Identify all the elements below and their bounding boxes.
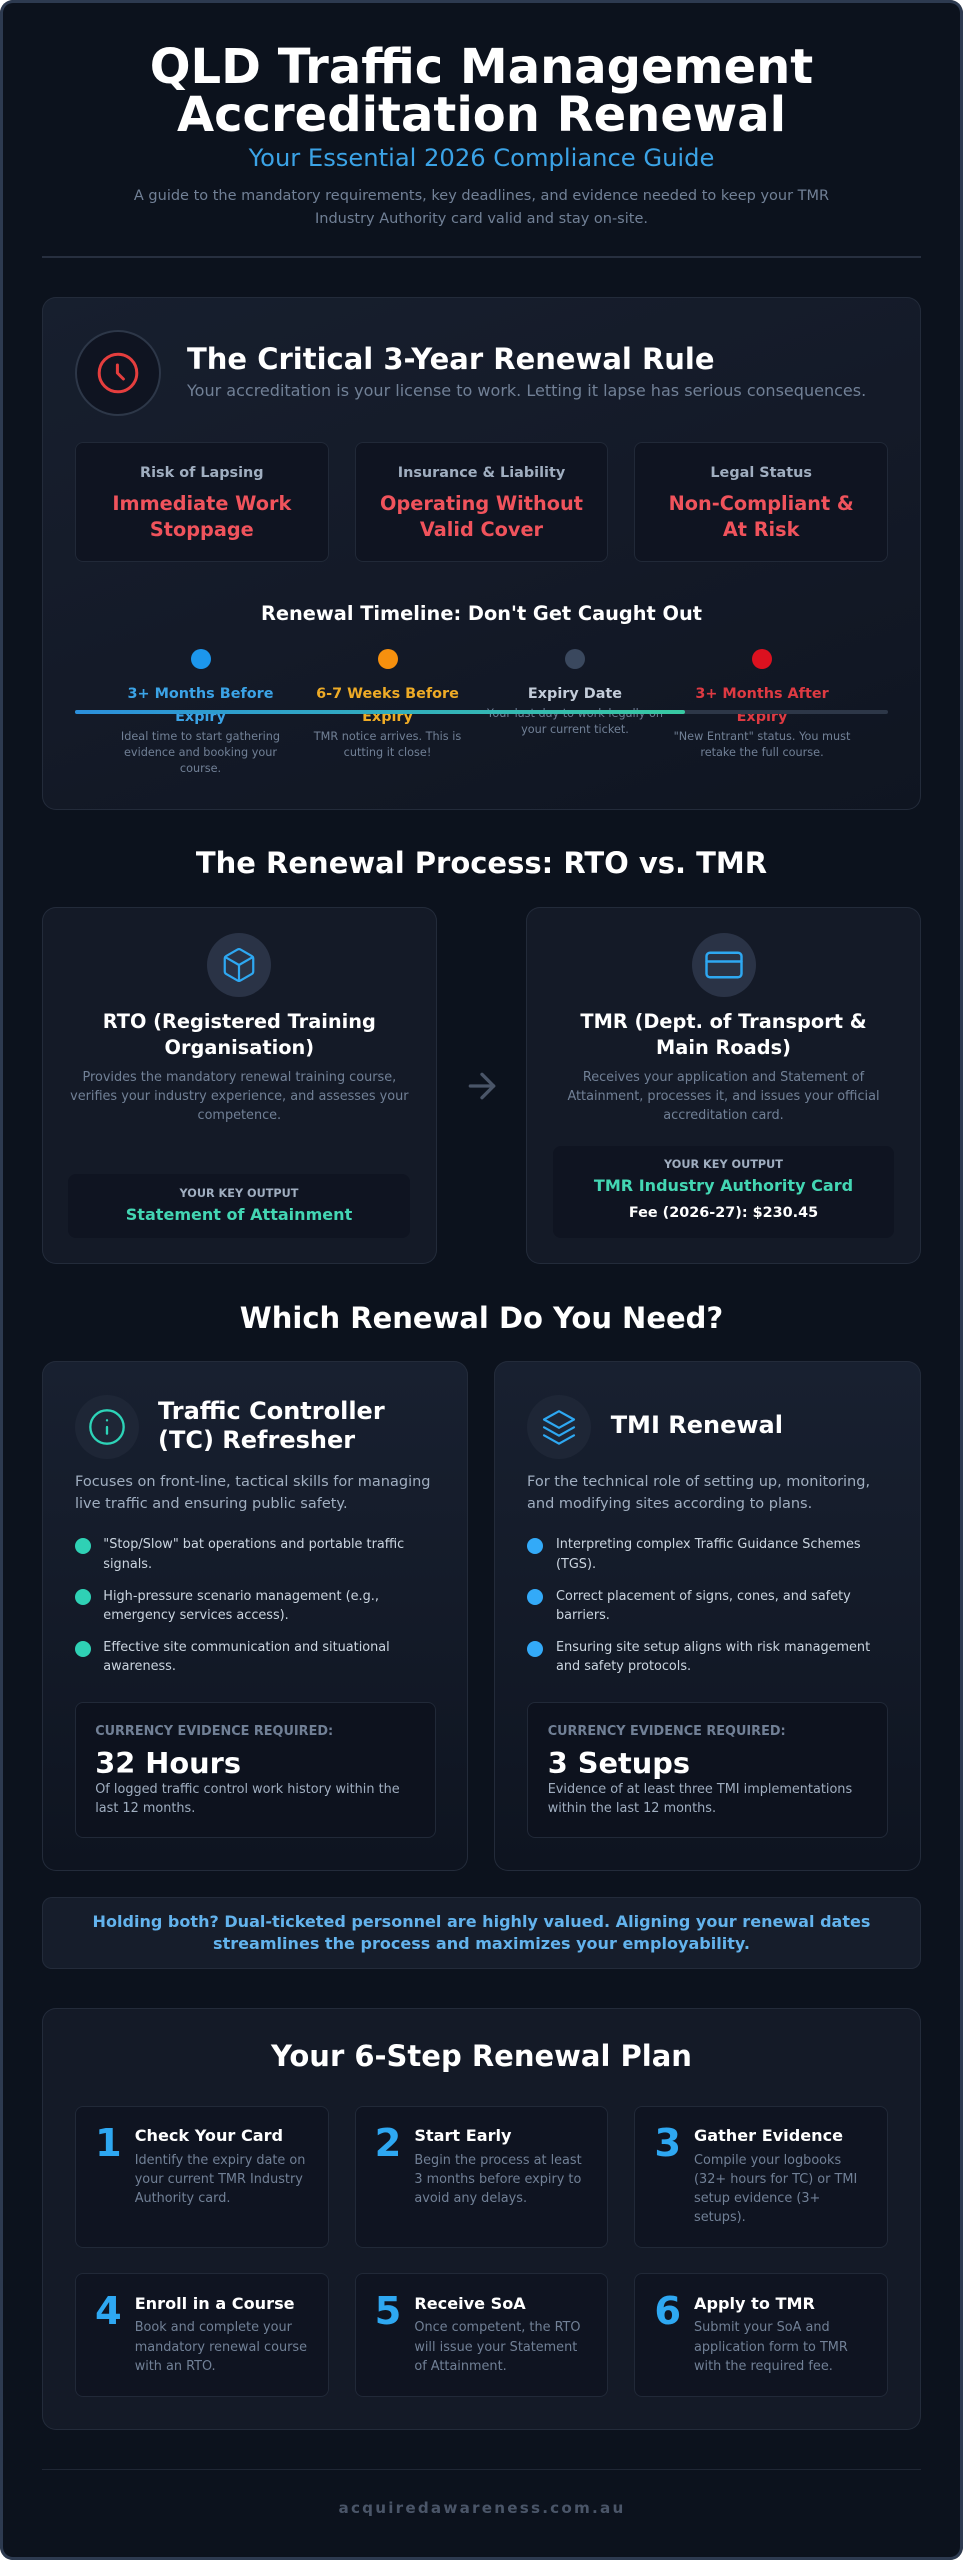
bullet text — [103, 1537, 404, 1572]
timeline dot: 3+ months before — [190, 649, 210, 669]
step title: Check Your Card — [135, 2126, 283, 2145]
step text: Once competent, the RTO — [414, 2320, 581, 2335]
TC description: Focuses on front-line, tactical skills for managing — [75, 1474, 430, 1490]
panel heading: The Critical 3-Year Renewal Rule — [187, 342, 715, 376]
timeline track — [75, 710, 888, 714]
icon: info — [75, 1395, 139, 1459]
step text — [414, 2153, 582, 2206]
card value: Valid Cover — [420, 518, 543, 540]
TMI description: For the technical role of setting up, monitoring, — [527, 1474, 870, 1490]
TMR heading: TMR (Dept. of Transport & — [580, 1010, 867, 1033]
step text: Book and complete your — [135, 2320, 292, 2335]
TMI description — [527, 1474, 870, 1512]
step text: of Attainment. — [414, 2359, 507, 2374]
fee: Fee (2026-27): $230.45 — [629, 1205, 818, 1221]
timeline label: 3+ months after: Expiry — [737, 709, 787, 725]
TMR heading: Main Roads) — [656, 1036, 791, 1059]
bullet text: (TGS). — [556, 1556, 596, 1572]
output label: YOUR KEY OUTPUT — [180, 1187, 298, 1200]
timeline label: 3+ months before — [128, 686, 273, 725]
callout text: Holding both? Dual-ticketed personnel are highly valued. Aligning your renewal dates — [93, 1912, 870, 1931]
RTO description — [70, 1070, 409, 1123]
step 1 — [75, 2106, 329, 2248]
RTO description: verifies your industry experience, and assesses your — [70, 1089, 409, 1104]
timeline text: 6-7 weeks before — [314, 730, 461, 758]
TC heading — [158, 1397, 385, 1454]
step title: Enroll in a Course — [135, 2294, 295, 2313]
timeline text: expiry date: Your last day to work legally on — [487, 707, 663, 720]
card value: Immediate Work — [112, 492, 291, 514]
step number: 1 — [95, 2121, 122, 2166]
evidence value: 32 Hours — [95, 1746, 241, 1780]
timeline label: 3+ months before: Expiry — [175, 709, 226, 725]
step text: application form to TMR — [694, 2340, 848, 2355]
bullet marker — [527, 1589, 543, 1605]
step text: Identify the expiry date on — [135, 2153, 305, 2168]
step text — [414, 2320, 581, 2374]
step title: Receive SoA — [414, 2294, 526, 2313]
timeline text: 6-7 weeks before: cutting it close! — [344, 746, 431, 758]
bullet marker — [527, 1538, 543, 1554]
card value — [380, 492, 583, 540]
panel: traffic controller refresher — [42, 1361, 468, 1871]
step text: setup evidence (3+ — [694, 2191, 820, 2206]
evidence text: last 12 months. — [95, 1801, 195, 1816]
panel heading: Your 6-Step Renewal Plan — [271, 2039, 692, 2073]
intro text — [134, 188, 829, 227]
timeline text: 3+ months after: retake the full course. — [700, 746, 824, 758]
RTO description: Provides the mandatory renewal training course, — [82, 1070, 396, 1085]
timeline text: 3+ months before: Ideal time to start gathering — [121, 730, 280, 742]
evidence text — [548, 1782, 852, 1816]
card value — [112, 492, 292, 540]
TC heading: (TC) Refresher — [158, 1426, 355, 1454]
card: legal status — [634, 442, 888, 562]
step title: Apply to TMR — [694, 2294, 815, 2313]
bullet marker — [75, 1589, 91, 1605]
step text: Submit your SoA and — [694, 2320, 830, 2335]
bullet text — [556, 1640, 870, 1674]
currency evidence box — [74, 1702, 436, 1838]
evidence text: within the last 12 months. — [548, 1801, 716, 1816]
timeline dot: expiry date — [565, 649, 585, 669]
card label: Legal Status — [710, 465, 812, 481]
step text: setups). — [694, 2210, 746, 2225]
RTO key output — [68, 1174, 410, 1238]
step text: with an RTO. — [135, 2359, 216, 2374]
bullet text: "Stop/Slow" bat operations and portable traffic — [103, 1537, 404, 1552]
callout: dual-ticketed — [42, 1897, 921, 1969]
icon: layers — [527, 1395, 591, 1459]
bullet text — [103, 1640, 390, 1674]
timeline label: 6-7 weeks before — [316, 686, 459, 725]
timeline label: 3+ months before: 3+ Months Before — [128, 686, 273, 702]
callout text: streamlines the process and maximizes your employability. — [213, 1934, 750, 1953]
bullet text: Interpreting complex Traffic Guidance Schemes — [556, 1537, 861, 1552]
timeline text: 6-7 weeks before: TMR notice arrives. This is — [314, 730, 461, 742]
card value: Non-Compliant & — [669, 492, 854, 514]
output label: YOUR KEY OUTPUT — [664, 1158, 783, 1171]
step 4 — [75, 2273, 329, 2397]
timeline label: expiry date: Expiry Date — [528, 686, 622, 702]
icon: box — [207, 933, 271, 997]
step text: Begin the process at least — [414, 2153, 582, 2168]
evidence value: 3 Setups — [548, 1746, 690, 1780]
bullet text — [556, 1589, 851, 1623]
intro text: Industry Authority card valid and stay on-site. — [315, 211, 648, 227]
step text — [694, 2320, 848, 2374]
panel subheading: Your accreditation is your license to work. Letting it lapse has serious consequences. — [187, 381, 866, 400]
card value: Operating Without — [380, 492, 583, 514]
timeline text: 3+ months before: course. — [180, 762, 221, 774]
title: Accreditation Renewal — [177, 86, 786, 142]
step text: avoid any delays. — [414, 2191, 527, 2206]
RTO heading: RTO (Registered Training — [103, 1010, 376, 1033]
evidence label: CURRENCY EVIDENCE REQUIRED: — [548, 1724, 786, 1739]
step text: will issue your Statement — [414, 2340, 577, 2355]
bullet text — [556, 1537, 861, 1572]
evidence text: Of logged traffic control work history within the — [95, 1782, 400, 1797]
timeline progress — [75, 710, 685, 714]
icon: card — [692, 933, 756, 997]
TMR description — [567, 1070, 880, 1123]
card label: Risk of Lapsing — [140, 465, 264, 481]
step text: Authority card. — [135, 2191, 230, 2206]
TMI description: and modifying sites according to plans. — [527, 1496, 812, 1512]
output value: Statement of Attainment — [126, 1204, 352, 1224]
step title: Gather Evidence — [694, 2126, 843, 2145]
panel: TMI renewal — [494, 1361, 921, 1871]
timeline label: 6-7 weeks before: 6-7 Weeks Before — [316, 686, 459, 702]
step text: 3 months before expiry to — [414, 2172, 581, 2187]
RTO heading: Organisation) — [164, 1036, 314, 1059]
bullet text: awareness. — [103, 1659, 176, 1674]
step text: (32+ hours for TC) or TMI — [694, 2172, 857, 2187]
step number: 6 — [654, 2289, 681, 2334]
timeline heading: Renewal Timeline: Don't Get Caught Out — [261, 602, 702, 625]
step 6 — [634, 2273, 888, 2397]
bullet text: Ensuring site setup aligns with risk management — [556, 1640, 870, 1655]
timeline label: 3+ months after: 3+ Months After — [695, 686, 829, 702]
arrow — [468, 1072, 496, 1100]
step number: 3 — [654, 2121, 681, 2166]
footer: acquiredawareness.com.au — [338, 2498, 625, 2516]
TC heading: Traffic Controller — [158, 1397, 385, 1425]
step text — [694, 2153, 857, 2225]
callout text — [93, 1912, 870, 1953]
TC description: live traffic and ensuring public safety. — [75, 1496, 348, 1512]
TMR heading — [580, 1010, 867, 1059]
step number: 4 — [95, 2289, 122, 2334]
timeline dot: 3+ months after — [752, 649, 772, 669]
card: insurance and liability — [355, 442, 608, 562]
bullet text: Effective site communication and situational — [103, 1640, 390, 1655]
step 2 — [355, 2106, 608, 2248]
evidence label: CURRENCY EVIDENCE REQUIRED: — [95, 1724, 333, 1739]
TMR description: Receives your application and Statement of — [583, 1070, 864, 1085]
timeline text: 3+ months after: "New Entrant" status. You must — [674, 730, 850, 742]
bullet text: Correct placement of signs, cones, and safety — [556, 1589, 851, 1604]
TMR key output — [553, 1146, 894, 1238]
TMR description: Attainment, processes it, and issues your official — [567, 1089, 880, 1104]
subtitle: Your Essential 2026 Compliance Guide — [249, 144, 714, 172]
bullet marker — [527, 1641, 543, 1657]
timeline text: 3+ months before — [121, 730, 280, 774]
title: QLD Traffic Management — [150, 38, 813, 94]
timeline dot: 6-7 weeks before — [378, 649, 398, 669]
card: risk of lapsing — [75, 442, 329, 562]
timeline text: 3+ months before: evidence and booking your — [124, 746, 277, 758]
panel: critical 3-year renewal rule — [42, 297, 921, 810]
heading: renewal process: The Renewal Process: RTO vs. TMR — [196, 846, 767, 880]
step text: your current TMR Industry — [135, 2172, 303, 2187]
currency evidence box — [527, 1702, 888, 1838]
output value: TMR Industry Authority Card — [594, 1176, 853, 1194]
intro text: A guide to the mandatory requirements, key deadlines, and evidence needed to keep your TMR — [134, 188, 829, 204]
timeline — [75, 649, 888, 774]
timeline label: 3+ months after — [695, 686, 829, 725]
bullet text — [103, 1589, 379, 1623]
step text: mandatory renewal course — [135, 2340, 307, 2355]
TC description — [75, 1474, 430, 1512]
timeline text: expiry date: your current ticket. — [521, 723, 629, 736]
bullet marker — [75, 1641, 91, 1657]
TMR description: accreditation card. — [663, 1108, 784, 1123]
RTO heading — [103, 1010, 376, 1059]
card value: At Risk — [723, 518, 799, 540]
timeline text: 3+ months after — [674, 730, 850, 758]
step text — [134, 2153, 305, 2206]
bullet text: and safety protocols. — [556, 1659, 691, 1674]
evidence text: Evidence of at least three TMI implementations — [548, 1782, 852, 1797]
bullet text: High-pressure scenario management (e.g., — [103, 1589, 379, 1604]
card value — [669, 492, 854, 540]
bullet marker — [75, 1538, 91, 1554]
bullet text: signals. — [103, 1556, 152, 1572]
step 3 — [634, 2106, 888, 2248]
step text — [135, 2320, 307, 2374]
bullet text: emergency services access). — [103, 1608, 289, 1623]
TMI heading: TMI Renewal — [611, 1411, 783, 1439]
panel: 6-step renewal plan — [42, 2008, 921, 2430]
step number: 5 — [375, 2289, 401, 2334]
heading: which renewal: Which Renewal Do You Need? — [240, 1301, 723, 1335]
title — [150, 38, 813, 142]
timeline label: 6-7 weeks before: Expiry — [362, 709, 413, 725]
card value: Stoppage — [150, 518, 254, 540]
step title: Start Early — [414, 2126, 512, 2145]
step text: with the required fee. — [694, 2359, 833, 2374]
icon: clock — [75, 330, 161, 416]
bullet text: barriers. — [556, 1608, 610, 1623]
timeline text: expiry date — [487, 707, 663, 736]
step number: 2 — [375, 2121, 401, 2166]
panel: TMR — [526, 907, 921, 1264]
evidence text — [95, 1782, 400, 1816]
step text: Compile your logbooks — [694, 2153, 841, 2168]
step 5 — [355, 2273, 608, 2397]
panel: RTO — [42, 907, 437, 1264]
card label: Insurance & Liability — [398, 465, 565, 481]
RTO description: competence. — [198, 1108, 281, 1123]
